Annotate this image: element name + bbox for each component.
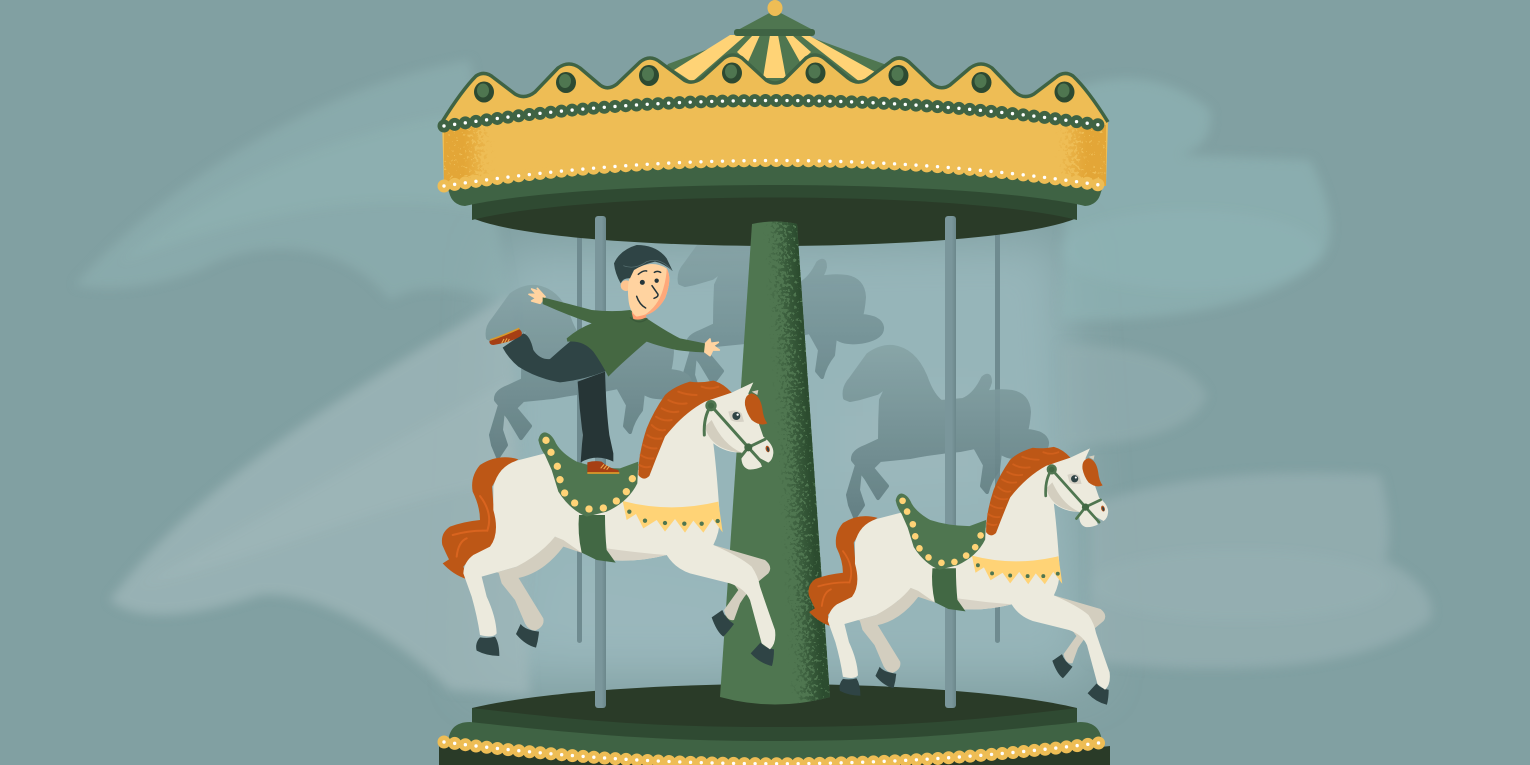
- canopy: roof: [650, 0, 900, 90]
- platform light rim: [448, 722, 1102, 765]
- platform mid band: [472, 708, 1077, 745]
- hair: [614, 245, 673, 283]
- platform beads: [444, 742, 1106, 764]
- man balancing on the saddle: [489, 245, 719, 474]
- raised shoe: [489, 328, 522, 345]
- platform skirt: [439, 746, 1110, 765]
- ghost horses behind: [488, 232, 1047, 517]
- standing leg: [578, 372, 613, 462]
- mane: [638, 381, 732, 479]
- top bead row: [444, 100, 1106, 126]
- gems: [474, 62, 1074, 102]
- lower-right brush patch: [1090, 473, 1432, 668]
- breast strap: [623, 501, 723, 533]
- cheek shade: [705, 420, 742, 453]
- ear: [621, 280, 631, 291]
- bridle: [704, 406, 765, 464]
- mid band: [472, 183, 1077, 220]
- crown scalloped outline: [442, 55, 1108, 122]
- head: [614, 245, 673, 317]
- crown edge shading: [444, 116, 500, 186]
- sweater: [543, 297, 705, 377]
- roof cone: [650, 34, 900, 90]
- horse body: [463, 382, 775, 649]
- middle-right brush patch: [1060, 345, 1207, 445]
- nostril: [765, 445, 770, 453]
- face: [628, 264, 669, 317]
- finial ball: [768, 0, 782, 16]
- bottom platform: [439, 684, 1110, 765]
- belly shade: [607, 548, 667, 561]
- second ear: [752, 390, 758, 395]
- upper-left brush patch: [75, 60, 510, 300]
- raised leg: [503, 333, 606, 382]
- bottom gold bead row: [444, 160, 1106, 186]
- dark lens: [472, 185, 1077, 246]
- light rim: [444, 158, 1106, 206]
- blush: [643, 268, 669, 316]
- upper-right brush patch: [1060, 79, 1330, 320]
- eye: [728, 410, 744, 422]
- back poles: [577, 232, 1000, 643]
- saddle: [538, 432, 638, 517]
- platform top dark lens: [472, 684, 1077, 735]
- girth: [579, 515, 616, 563]
- forelock: [745, 393, 767, 424]
- head details: [704, 390, 770, 464]
- hands: [529, 288, 719, 356]
- horse: second horse on the right: [808, 447, 1110, 705]
- roof stripes: [674, 35, 875, 82]
- canopy: gold crown with gems: [442, 55, 1108, 186]
- front poles: [595, 216, 956, 708]
- neck: [632, 310, 647, 320]
- lower-left brush patch: [110, 295, 530, 695]
- roof band: [734, 29, 815, 36]
- standing shoe: [587, 461, 619, 474]
- horse: front carousel horse: [442, 381, 775, 666]
- facial features: [637, 271, 661, 308]
- canopy underside: [444, 158, 1106, 246]
- roof top triangle: [736, 10, 815, 31]
- far legs: [497, 537, 770, 631]
- central column: [720, 222, 830, 704]
- hooves: [476, 610, 774, 666]
- tail: [442, 457, 518, 579]
- column grainy shadow: [720, 222, 830, 704]
